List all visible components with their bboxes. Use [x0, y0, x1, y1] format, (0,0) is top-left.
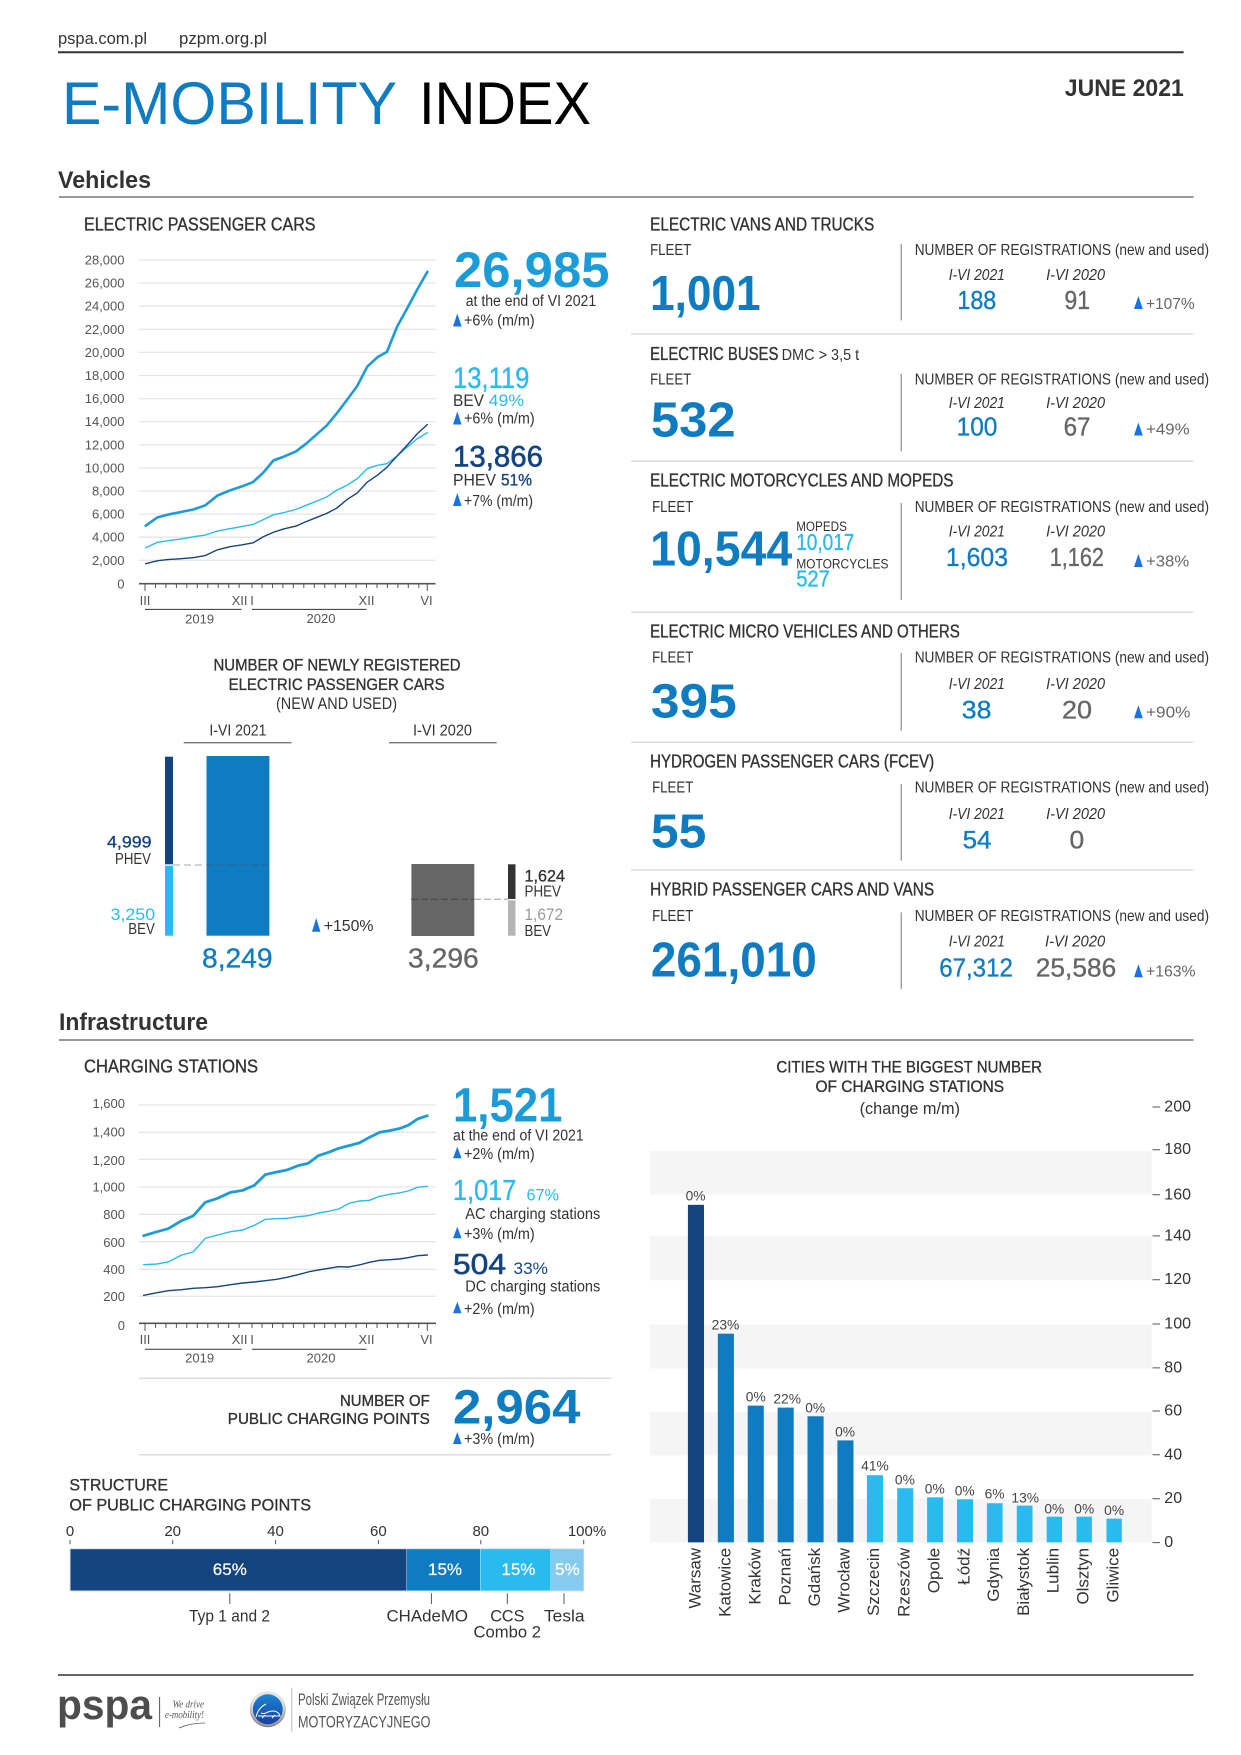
- type labels: [189, 1593, 585, 1642]
- value labels: 0%: [686, 1187, 706, 1204]
- city labels: Opole: [925, 1548, 943, 1593]
- panel: motorcycles and mopeds: 10,017: [796, 529, 854, 555]
- panel: hybrid cars and vans: 67,312: [939, 953, 1013, 983]
- KPI: PHEV: 51%: [501, 471, 532, 490]
- grid lines and y axis: 26,000: [85, 276, 124, 291]
- panel: cities chart: CITIES WITH THE BIGGEST NUMBER: [776, 1057, 1042, 1076]
- panel: electric passenger cars chart: ELECTRIC PASSENGER CARS: [84, 215, 316, 235]
- x axis: I: [250, 593, 254, 608]
- KPI: public charging points: [139, 1378, 611, 1455]
- panel: structure of public charging points: OF PUBLIC CHARGING POINTS: [69, 1496, 311, 1515]
- grid lines and y axis: 12,000: [85, 437, 124, 452]
- logo: pspa: [57, 1681, 205, 1728]
- panel: motorcycles and mopeds: [631, 470, 1209, 612]
- labels 2021: 4,999: [107, 833, 152, 852]
- panel: hydrogen cars: FLEET: [652, 780, 694, 797]
- grid and y axis: 800: [103, 1207, 125, 1222]
- grid lines and y axis: 28,000: [85, 252, 124, 268]
- value labels: [686, 1187, 1124, 1518]
- x axis: 2020: [307, 1351, 335, 1366]
- y axis scale: 0: [1164, 1534, 1173, 1551]
- labels 2021: PHEV: [115, 851, 152, 868]
- y axis scale: 180: [1164, 1141, 1191, 1158]
- KPI: public charging points: 2,964: [453, 1381, 581, 1434]
- grid and y axis: 600: [103, 1235, 125, 1250]
- scale: 20: [164, 1523, 181, 1540]
- panel: electric vans and trucks: 91: [1064, 285, 1090, 315]
- KPI: public charging points: +3% (m/m): [464, 1431, 535, 1448]
- panel: hybrid cars and vans: I-VI 2021: [949, 934, 1005, 951]
- KPI: DC stations: +2% (m/m): [464, 1301, 535, 1318]
- value labels: 0%: [805, 1399, 825, 1415]
- panel: electric buses: 67: [1064, 412, 1090, 442]
- panel: electric buses: FLEET: [650, 372, 692, 388]
- stacked bar: [70, 1548, 584, 1592]
- value labels: 6%: [985, 1485, 1005, 1502]
- scale: 0: [66, 1523, 74, 1540]
- grid lines and y axis: 20,000: [85, 345, 124, 360]
- panel: cities chart: [650, 1057, 1191, 1617]
- y axis scale: 60: [1164, 1402, 1182, 1420]
- panel: motorcycles and mopeds: 10,544: [650, 522, 792, 576]
- labels 2020: BEV: [524, 923, 552, 940]
- panel: electric vans and trucks: 1,001: [650, 267, 761, 321]
- KPI: BEV: [453, 362, 535, 428]
- KPI: PHEV: [453, 440, 543, 510]
- panel: micro vehicles: +90%: [1146, 705, 1190, 722]
- labels 2021: 3,250: [111, 905, 155, 924]
- bar 2021: [165, 756, 269, 936]
- lines: total, BEV, PHEV: [146, 272, 427, 564]
- x axis: 2019: [185, 612, 214, 627]
- x axis: XII: [359, 593, 374, 608]
- x axis: III: [140, 593, 150, 608]
- KPI: DC stations: 504: [453, 1249, 506, 1281]
- x axis: XII: [232, 593, 248, 608]
- panel: micro vehicles: [631, 621, 1209, 742]
- panel: hybrid cars and vans: +163%: [1146, 964, 1196, 981]
- panel: electric buses: I-VI 2021: [949, 395, 1005, 412]
- panel: electric buses: +49%: [1146, 422, 1190, 439]
- y axis scale: 80: [1164, 1359, 1182, 1376]
- city labels: Warsaw: [686, 1547, 704, 1609]
- bars: [688, 1205, 1122, 1542]
- logo: PZPM: [250, 1688, 430, 1732]
- KPI: DC stations: 33%: [514, 1259, 548, 1278]
- grid lines and y axis: 10,000: [85, 460, 124, 475]
- grid and y axis: 200: [103, 1289, 125, 1304]
- grid and y axis: 1,600: [92, 1096, 125, 1111]
- grid and y axis: [92, 1096, 436, 1333]
- title: [62, 70, 591, 137]
- panel: motorcycles and mopeds: I-VI 2021: [949, 524, 1005, 541]
- KPI: PHEV: +7% (m/m): [464, 493, 533, 510]
- scale: 100%: [568, 1523, 606, 1540]
- x axis: XII: [359, 1332, 374, 1347]
- value labels: 0%: [1104, 1502, 1124, 1518]
- KPI: AC stations: 1,017: [453, 1175, 516, 1207]
- labels 2021: BEV: [128, 921, 155, 938]
- KPI: BEV: 13,119: [453, 362, 529, 395]
- city labels: Gliwice: [1104, 1548, 1122, 1603]
- labels 2020: 3,296: [408, 943, 479, 974]
- city labels: Łódź: [954, 1548, 973, 1585]
- labels 2020: [408, 867, 565, 974]
- panel: hydrogen cars: 0: [1070, 826, 1084, 854]
- value labels: 22%: [773, 1390, 801, 1407]
- panel: electric buses: DMC > 3,5 t: [782, 347, 860, 364]
- x axis: [139, 584, 436, 627]
- KPI: BEV: BEV: [453, 391, 485, 410]
- grid and y axis: 1,200: [92, 1153, 125, 1168]
- y axis scale: 120: [1164, 1271, 1191, 1288]
- value labels: 13%: [1011, 1489, 1039, 1505]
- stacked bar: 15%: [501, 1560, 535, 1579]
- panel: micro vehicles: I-VI 2021: [949, 676, 1005, 693]
- panel: structure of public charging points: STRUCTURE: [69, 1476, 168, 1495]
- panel: motorcycles and mopeds: ELECTRIC MOTORCYCLES AND MOPEDS: [650, 470, 954, 490]
- KPI: public charging points: NUMBER OF: [340, 1393, 430, 1410]
- value labels: 41%: [861, 1457, 889, 1473]
- panel: newly registered cars: I-VI 2021: [209, 723, 266, 740]
- grid lines and y axis: 6,000: [92, 507, 124, 522]
- KPI: AC stations: 67%: [526, 1186, 559, 1205]
- grid and y axis: 0: [118, 1318, 125, 1333]
- logo: pspa: We drive: [173, 1700, 204, 1711]
- type labels: Tesla: [544, 1607, 585, 1626]
- panel: motorcycles and mopeds: 527: [796, 566, 830, 592]
- panel: electric vans and trucks: FLEET: [650, 242, 692, 259]
- stacked bar: 5%: [555, 1560, 580, 1579]
- panel: electric vans and trucks: I-VI 2021: [949, 267, 1005, 284]
- bands: [650, 1151, 1152, 1542]
- panel: newly registered cars: I-VI 2020: [413, 723, 472, 740]
- x axis: XII: [232, 1332, 248, 1347]
- change arrow: +150%: [324, 918, 374, 935]
- logo: pspa: pspa: [57, 1681, 153, 1728]
- KPI: total electric cars: at the end of VI 2021: [466, 293, 596, 310]
- type labels: Combo 2: [474, 1623, 541, 1642]
- value labels: 0%: [1074, 1500, 1094, 1517]
- panel: hydrogen cars: 54: [963, 826, 992, 854]
- panel: hybrid cars and vans: 261,010: [651, 934, 817, 988]
- bar 2020: [411, 864, 516, 936]
- panel: charging stations chart: [84, 1057, 436, 1366]
- KPI: total stations: +2% (m/m): [464, 1146, 535, 1163]
- city labels: Katowice: [716, 1548, 734, 1617]
- footer rule: [58, 1674, 1194, 1676]
- panel: electric buses: 532: [651, 394, 736, 448]
- labels 2020: PHEV: [524, 884, 562, 901]
- city labels: Kraków: [746, 1547, 764, 1605]
- panel: motorcycles and mopeds: +38%: [1146, 554, 1189, 570]
- KPI: DC stations: DC charging stations: [465, 1279, 601, 1296]
- y axis scale: 200: [1164, 1098, 1191, 1116]
- y axis scale: 100: [1164, 1316, 1191, 1332]
- KPI: total stations: at the end of VI 2021: [453, 1128, 584, 1145]
- value labels: 0%: [746, 1388, 766, 1405]
- panel: cities chart: (change m/m): [860, 1099, 960, 1118]
- city labels: Białystok: [1014, 1547, 1033, 1616]
- panel: micro vehicles: 38: [962, 696, 992, 724]
- KPI: BEV: 49%: [489, 391, 524, 410]
- grid lines and y axis: 22,000: [85, 322, 124, 337]
- y axis scale: 40: [1164, 1446, 1182, 1463]
- grid lines and y axis: 24,000: [85, 299, 124, 314]
- KPI: public charging points: PUBLIC CHARGING POINTS: [228, 1411, 430, 1428]
- panel: hydrogen cars: 55: [651, 805, 706, 858]
- value labels: 0%: [895, 1471, 915, 1487]
- value labels: 0%: [1044, 1500, 1064, 1517]
- KPI: PHEV: 13,866: [453, 440, 543, 474]
- scale: [66, 1523, 606, 1544]
- grid lines and y axis: 4,000: [92, 530, 124, 545]
- panel: motorcycles and mopeds: 1,162: [1050, 542, 1104, 572]
- KPI: total electric cars: [453, 242, 610, 330]
- KPI: DC stations: [453, 1249, 601, 1318]
- logo: PZPM: MOTORYZACYJNEGO: [298, 1712, 430, 1731]
- panel: micro vehicles: 395: [651, 676, 737, 729]
- value labels: 23%: [712, 1317, 739, 1333]
- x axis: 2019: [185, 1351, 214, 1366]
- x axis: 2020: [307, 611, 335, 626]
- x axis: I: [250, 1332, 254, 1347]
- labels 2020: 1,624: [524, 867, 565, 886]
- panel: micro vehicles: ELECTRIC MICRO VEHICLES AND OTHERS: [650, 621, 960, 641]
- KPI: total electric cars: 26,985: [454, 242, 610, 298]
- panel: motorcycles and mopeds: MOTORCYCLES: [796, 557, 888, 572]
- KPI: BEV: +6% (m/m): [464, 411, 535, 428]
- grid lines and y axis: 0: [117, 576, 124, 592]
- city labels: Wrocław: [835, 1547, 853, 1613]
- x axis: VI: [420, 1332, 433, 1347]
- panel: newly registered cars: (NEW AND USED): [276, 694, 397, 713]
- grid and y axis: 1,000: [92, 1180, 125, 1194]
- y axis scale: 20: [1164, 1490, 1182, 1507]
- panel: newly registered cars: [107, 656, 565, 974]
- city labels: Olsztyn: [1074, 1548, 1092, 1605]
- KPI: AC stations: [453, 1175, 601, 1243]
- grid and y axis: 1,400: [92, 1125, 125, 1140]
- heading: Vehicles: Vehicles: [58, 167, 151, 194]
- panel: motorcycles and mopeds: FLEET: [652, 499, 694, 516]
- type labels: CHAdeMO: [386, 1607, 468, 1626]
- x axis: [139, 1323, 436, 1366]
- logo: PZPM: Polski Związek Przemysłu: [298, 1690, 430, 1709]
- y axis scale: 160: [1164, 1186, 1191, 1203]
- grid lines and y axis: 18,000: [85, 368, 124, 383]
- panel: motorcycles and mopeds: 1,603: [946, 542, 1008, 572]
- panel: motorcycles and mopeds: MOPEDS: [796, 519, 847, 534]
- value labels: 0%: [925, 1480, 945, 1496]
- panel: hybrid cars and vans: I-VI 2020: [1045, 934, 1106, 951]
- panel: cities chart: OF CHARGING STATIONS: [816, 1077, 1004, 1096]
- KPI: total stations: 1,521: [453, 1080, 562, 1133]
- lines: total, AC, DC: [144, 1116, 427, 1295]
- panel: structure of public charging points: [66, 1476, 606, 1642]
- panel: newly registered cars: ELECTRIC PASSENGER CARS: [229, 675, 445, 694]
- value labels: 0%: [835, 1423, 855, 1439]
- panel: motorcycles and mopeds: I-VI 2020: [1046, 524, 1105, 541]
- header links: [58, 30, 1184, 52]
- panel: electric buses: ELECTRIC BUSES: [650, 344, 778, 364]
- scale: 40: [267, 1523, 284, 1540]
- KPI: AC stations: AC charging stations: [465, 1206, 601, 1223]
- panel: electric vans and trucks: ELECTRIC VANS AND TRUCKS: [650, 215, 874, 235]
- city labels: Poznań: [775, 1548, 794, 1606]
- panel: electric vans and trucks: [631, 215, 1209, 334]
- grid lines and y axis: [85, 252, 436, 592]
- grid lines and y axis: 2,000: [92, 553, 124, 568]
- value labels: 0%: [955, 1482, 975, 1498]
- stacked bar: 65%: [213, 1560, 247, 1579]
- KPI: total electric cars: +6% (m/m): [464, 313, 535, 330]
- panel: hydrogen cars: [631, 752, 1209, 870]
- title: E-MOBILITY: [62, 70, 397, 137]
- scale: 60: [370, 1523, 387, 1540]
- panel: hybrid cars and vans: [650, 880, 1209, 989]
- panel: charging stations chart: CHARGING STATIONS: [84, 1057, 258, 1077]
- KPI: AC stations: +3% (m/m): [464, 1226, 535, 1243]
- grid and y axis: 400: [103, 1262, 125, 1277]
- grid lines and y axis: 8,000: [92, 484, 124, 498]
- panel: hydrogen cars: HYDROGEN PASSENGER CARS (FCEV): [650, 752, 934, 772]
- panel: electric buses: [631, 344, 1209, 461]
- type labels: CCS: [490, 1607, 524, 1626]
- grid lines and y axis: 14,000: [85, 414, 124, 429]
- y axis scale: [1152, 1098, 1191, 1551]
- x axis: III: [140, 1332, 150, 1347]
- KPI: total stations: [453, 1080, 584, 1163]
- panel: electric buses: 100: [957, 412, 997, 442]
- city labels: Gdańsk: [805, 1547, 824, 1606]
- panel: hydrogen cars: I-VI 2021: [949, 806, 1005, 823]
- grid lines and y axis: 16,000: [85, 391, 124, 406]
- type labels: Typ 1 and 2: [189, 1607, 270, 1626]
- date: JUNE 2021: [1065, 75, 1184, 102]
- scale: 80: [472, 1523, 489, 1540]
- city labels: Gdynia: [984, 1547, 1003, 1602]
- header links: pzpm.org.pl: [179, 30, 267, 48]
- labels 2021: 8,249: [202, 943, 273, 974]
- panel: electric vans and trucks: I-VI 2020: [1046, 267, 1105, 284]
- panel: electric passenger cars chart: [84, 215, 436, 627]
- city labels: Lublin: [1044, 1548, 1063, 1593]
- y axis scale: 140: [1164, 1227, 1191, 1244]
- stacked bar: 15%: [428, 1560, 462, 1579]
- panel: micro vehicles: 20: [1062, 696, 1092, 724]
- panel: micro vehicles: I-VI 2020: [1046, 676, 1105, 693]
- panel: newly registered cars: NUMBER OF NEWLY REGISTERED: [214, 656, 460, 675]
- panel: hybrid cars and vans: FLEET: [652, 908, 694, 925]
- panel: electric buses: I-VI 2020: [1046, 395, 1105, 412]
- KPI: PHEV: PHEV: [453, 471, 497, 490]
- city labels: Rzeszów: [895, 1547, 913, 1617]
- header links: pspa.com.pl: [58, 30, 147, 48]
- labels 2021: [107, 833, 273, 974]
- title: INDEX: [419, 70, 591, 137]
- city labels: [686, 1547, 1122, 1617]
- panel: electric vans and trucks: 188: [957, 285, 996, 315]
- panel: micro vehicles: FLEET: [652, 650, 694, 667]
- panel: hydrogen cars: I-VI 2020: [1046, 806, 1105, 823]
- logo: pspa: e-mobility!: [165, 1710, 204, 1721]
- panel: hybrid cars and vans: 25,586: [1036, 953, 1116, 983]
- city labels: Szczecin: [864, 1548, 883, 1616]
- labels 2020: 1,672: [524, 905, 563, 924]
- panel: electric vans and trucks: +107%: [1146, 296, 1195, 313]
- heading: Infrastructure: Infrastructure: [59, 1009, 208, 1036]
- panel: hybrid cars and vans: HYBRID PASSENGER CARS AND VANS: [650, 880, 934, 900]
- x axis: VI: [420, 593, 433, 608]
